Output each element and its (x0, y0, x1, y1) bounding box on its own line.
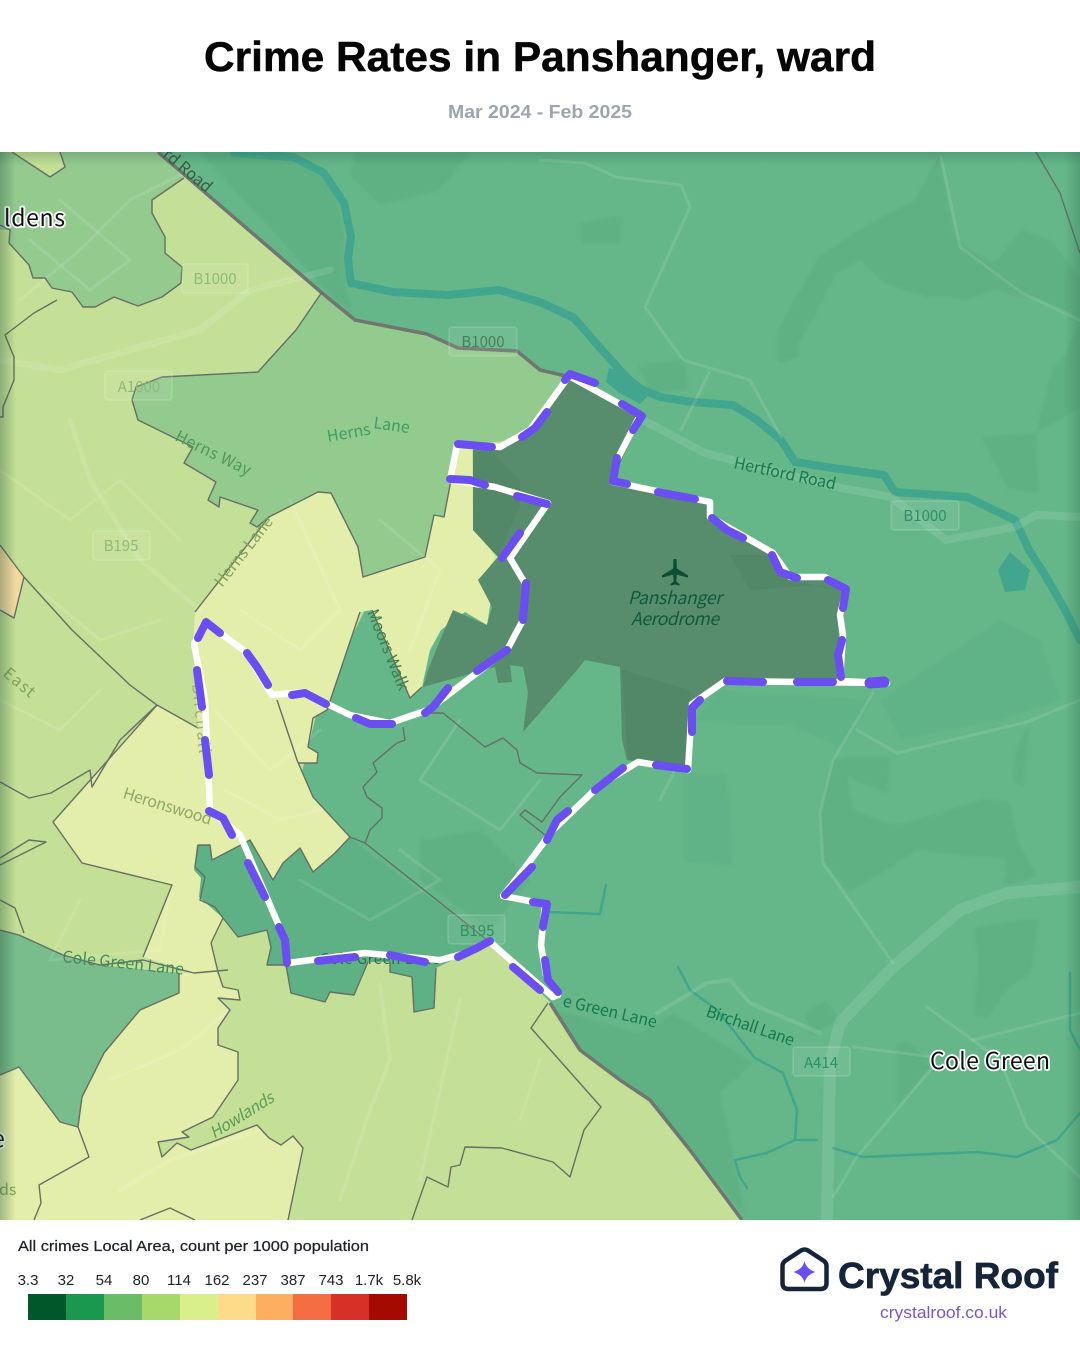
map road labels: Herns Way (172, 423, 257, 481)
legend values (18, 1272, 422, 1289)
map road labels: Hertford Road (732, 449, 839, 495)
legend values: 3.3 (18, 1272, 38, 1289)
map road labels: Lane (372, 409, 412, 438)
brand name: Crystal Roof (838, 1255, 1059, 1296)
map label shields: B1000 (461, 331, 505, 352)
map label shields: A414 (804, 1052, 838, 1073)
map road labels: Heronswood (121, 780, 216, 830)
map road labels: Herns Lane (207, 510, 278, 591)
ward boundary: purple dashes (197, 374, 884, 992)
brand website: crystalroof.co.uk (880, 1304, 1008, 1322)
legend values: 114 (167, 1272, 191, 1289)
faint dotted fields (683, 620, 1060, 865)
medium green area: Herns Lane (132, 292, 570, 577)
map label shields: B1000 (903, 505, 947, 526)
medium green area: north-west (0, 152, 184, 307)
icon: airport plane (662, 559, 688, 586)
green area: west Cole Green Lane (0, 930, 179, 1127)
map edge shading (0, 152, 1080, 1220)
yellow area: central (53, 445, 496, 973)
yellow area: far south-west corner (0, 1067, 89, 1220)
map roads (0, 157, 1080, 1220)
woodland patches (572, 1042, 691, 1154)
area: low crime green east (158, 152, 1080, 1220)
map label shields: A1000 (118, 376, 160, 397)
map label shields: B195 (104, 535, 138, 556)
place label: Cole Green: Cole Green (930, 1042, 1050, 1076)
area outlines (0, 152, 1080, 1220)
place label: Panshanger Aerodrome: Aerodrome (631, 606, 720, 631)
place label: Haldens: ldens (4, 199, 65, 233)
legend values: 162 (204, 1272, 230, 1289)
map road labels: Birchall (187, 682, 218, 754)
yellow area: south-west (34, 972, 303, 1220)
ward inner shading (473, 530, 498, 557)
tan area: west edge (0, 545, 24, 618)
map label shields: B195 (460, 920, 494, 941)
map road labels: rd Road (159, 141, 219, 197)
title: Crime Rates in Panshanger, ward (204, 33, 876, 80)
legend colour scale (28, 1294, 407, 1320)
legend values: 80 (133, 1272, 149, 1289)
place label: Panshanger Aerodrome (630, 590, 724, 626)
legend values: 1.7k (355, 1272, 384, 1289)
map label shields: B1000 (193, 268, 237, 289)
map road labels: Cole Green Lane (61, 943, 185, 980)
map road labels: Howlands (204, 1084, 279, 1143)
map base: light green areas (0, 152, 740, 1220)
icon: house with star (782, 1250, 826, 1289)
legend values: 387 (280, 1272, 306, 1289)
highlighted ward area: Panshanger (423, 378, 846, 770)
map road labels (0, 141, 839, 1200)
map label shields (93, 264, 959, 1076)
map road labels: e Green Lane (561, 987, 660, 1032)
rivers (234, 153, 1080, 1188)
ward boundary: white line (194, 376, 887, 997)
map road labels: East (0, 660, 42, 702)
legend values: 237 (242, 1272, 268, 1289)
map road labels: Cole Green Lane (320, 948, 440, 969)
legend title: All crimes Local Area, count per 1000 population (18, 1238, 369, 1255)
legend values: 32 (58, 1272, 74, 1289)
brand logo (782, 1250, 1059, 1322)
legend values: 54 (96, 1272, 112, 1289)
map road labels: Birchall Lane (703, 998, 798, 1051)
map road labels: Moors Walk (362, 605, 417, 694)
place label: Panshanger Aerodrome: Panshanger (628, 585, 725, 610)
legend values: 5.8k (393, 1272, 422, 1289)
green area: Cole Green Lane south lobes (194, 837, 490, 1012)
legend (18, 1238, 422, 1320)
legend values: 743 (318, 1272, 344, 1289)
choropleth map (0, 141, 1080, 1220)
subtitle: date range: Mar 2024 - Feb 2025 (448, 101, 632, 122)
map road labels: Herns (325, 416, 372, 447)
